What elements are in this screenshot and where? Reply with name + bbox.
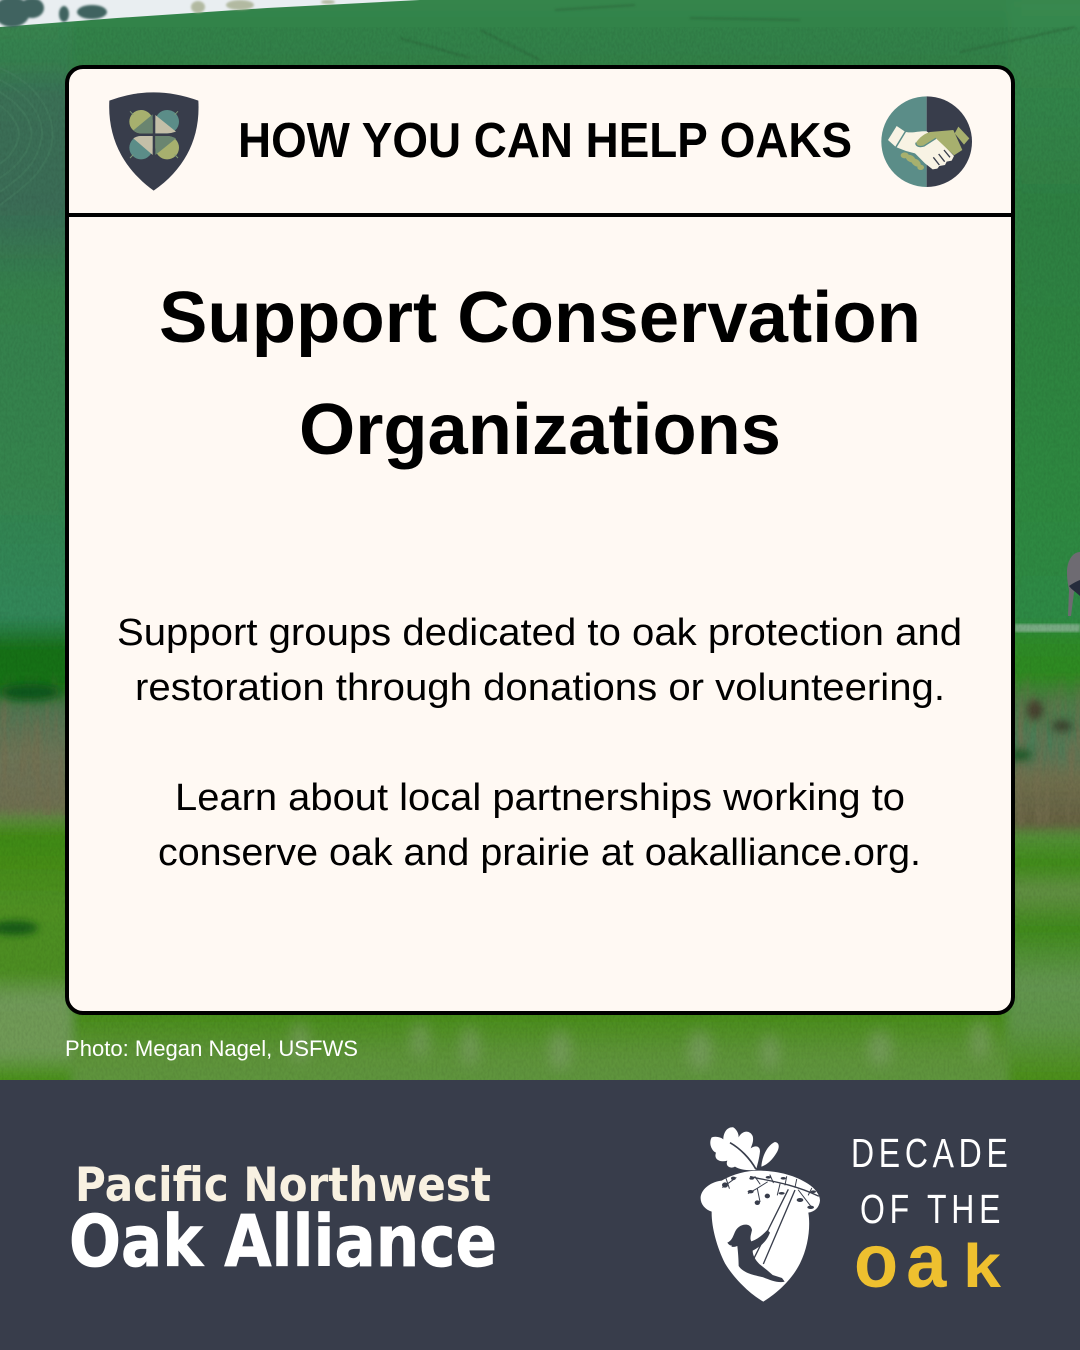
swing ropes [754, 1189, 795, 1264]
photo credit: Photo: Megan Nagel, USFWS [65, 1036, 358, 1061]
icon: oak alliance shield [109, 92, 199, 191]
icon: handshake [881, 96, 972, 187]
text block: local partnerships: Learn about local partnerships working to [175, 777, 905, 819]
girl silhouette [727, 1225, 785, 1282]
logo: pacific northwest oak alliance [69, 1158, 497, 1283]
wordmark: decade of the oak: DECADE [851, 1130, 1008, 1176]
panel: main card [67, 67, 1013, 1013]
wordmark: decade of the oak: k [963, 1231, 1002, 1300]
logo: pacific northwest oak alliance: Pacific Northwest [75, 1158, 491, 1213]
panel: footer band [0, 1080, 1080, 1350]
wordmark: decade of the oak [851, 1130, 1008, 1303]
distant shrubs and dry grass [0, 670, 1080, 1070]
text block: local partnerships [158, 777, 921, 874]
field rows on left [0, 68, 53, 205]
text block: local partnerships: conserve oak and prairie at oakalliance.org. [158, 832, 921, 874]
logo: pacific northwest oak alliance: Oak Alliance [69, 1200, 497, 1283]
logo: acorn with girl on swing [701, 1127, 820, 1302]
wordmark: decade of the oak: OF THE [860, 1186, 1000, 1232]
heading: how you can help oaks: HOW YOU CAN HELP OAKS [238, 114, 852, 168]
title: support conservation organizations [159, 278, 921, 470]
text block: support groups [117, 612, 962, 709]
text block: support groups: restoration through donations or volunteering. [135, 667, 945, 709]
title: support conservation organizations: Organizations [299, 390, 781, 470]
branch and foliage [723, 1175, 818, 1207]
title: support conservation organizations: Support Conservation [159, 278, 921, 358]
sky [0, 0, 420, 27]
wordmark: decade of the oak: oa [854, 1218, 947, 1303]
text block: support groups: Support groups dedicated to oak protection and [117, 612, 962, 654]
acorn body [701, 1171, 820, 1302]
icon: deer at field edge [1067, 552, 1080, 616]
oak leaf [710, 1127, 760, 1170]
